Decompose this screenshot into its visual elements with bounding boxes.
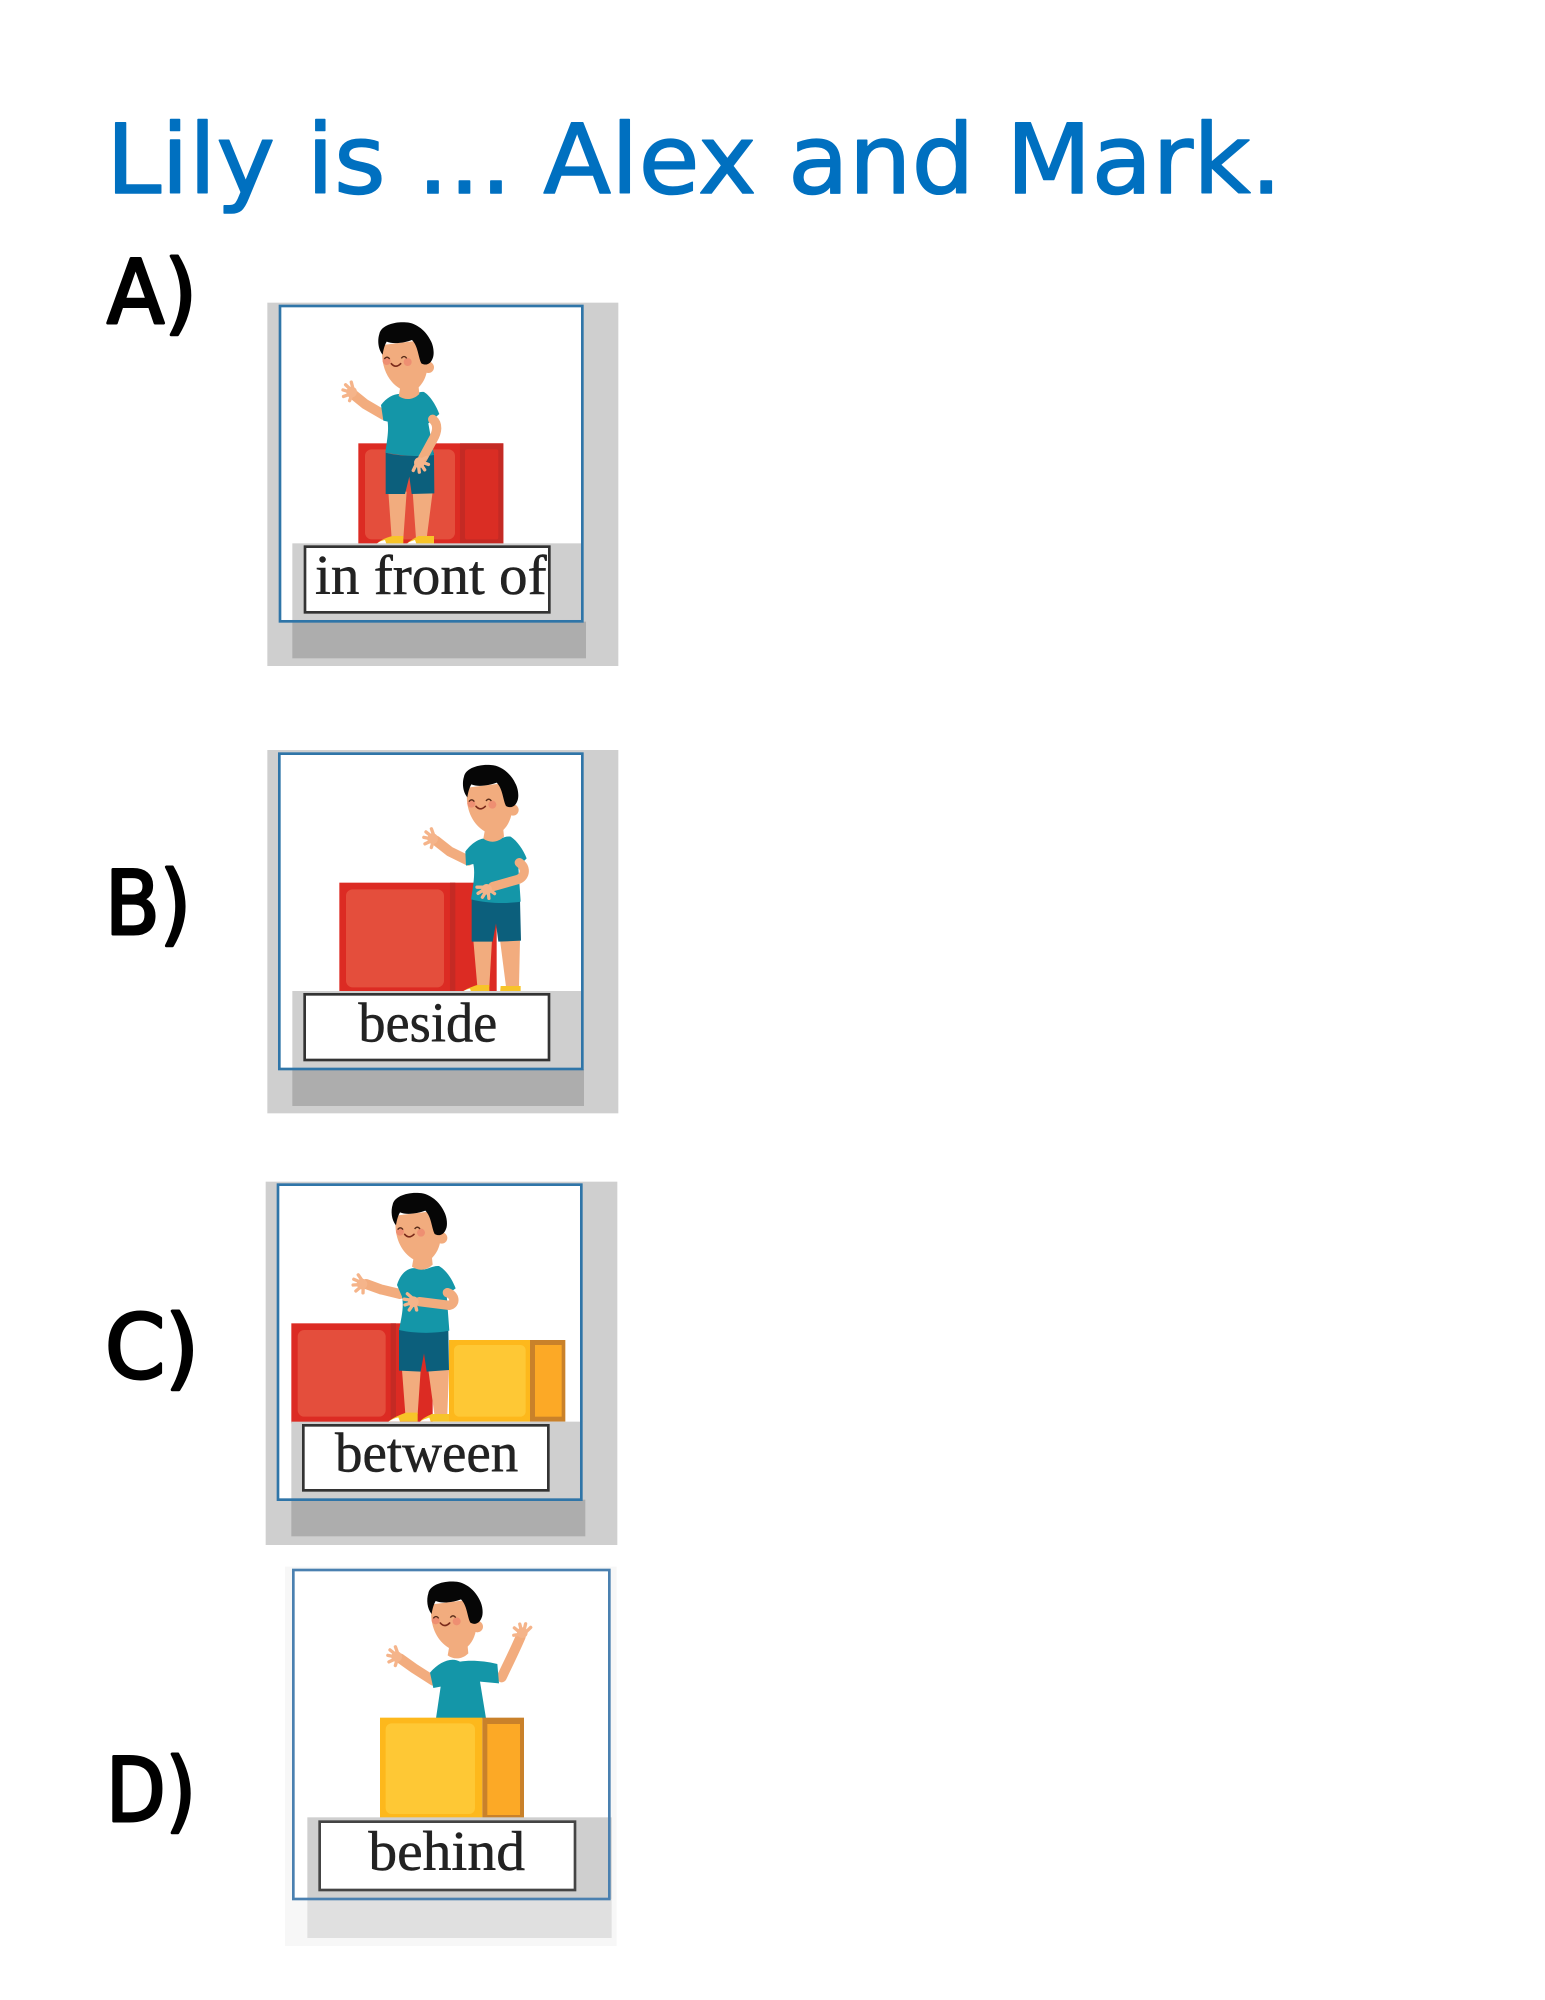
word label: between bbox=[335, 1423, 518, 1485]
panel: option A, in front of bbox=[267, 303, 618, 666]
word label bbox=[305, 993, 549, 1060]
word label: in front of bbox=[315, 545, 547, 607]
boy standing behind box bbox=[384, 1582, 531, 1718]
option letter B: B) bbox=[105, 852, 191, 955]
boy standing in front of box bbox=[339, 322, 439, 545]
word label bbox=[320, 1821, 575, 1890]
title: Lily is ... Alex and Mark. bbox=[106, 104, 1282, 216]
boy standing between boxes bbox=[350, 1193, 456, 1422]
red box bbox=[291, 1323, 433, 1423]
yellow box bbox=[380, 1718, 524, 1820]
panel: option D, behind bbox=[285, 1567, 617, 1946]
yellow box bbox=[449, 1340, 565, 1422]
option letter C: C) bbox=[105, 1296, 199, 1399]
boy standing beside box bbox=[420, 765, 527, 993]
word label: beside bbox=[358, 993, 497, 1055]
red box bbox=[358, 443, 503, 545]
word label bbox=[303, 1423, 548, 1490]
red box bbox=[339, 883, 497, 994]
option letter D: D) bbox=[106, 1739, 196, 1842]
option letter A: A) bbox=[107, 241, 197, 344]
word label: behind bbox=[368, 1821, 525, 1883]
panel: option B, beside bbox=[267, 750, 618, 1113]
panel: option C, between bbox=[266, 1182, 617, 1545]
